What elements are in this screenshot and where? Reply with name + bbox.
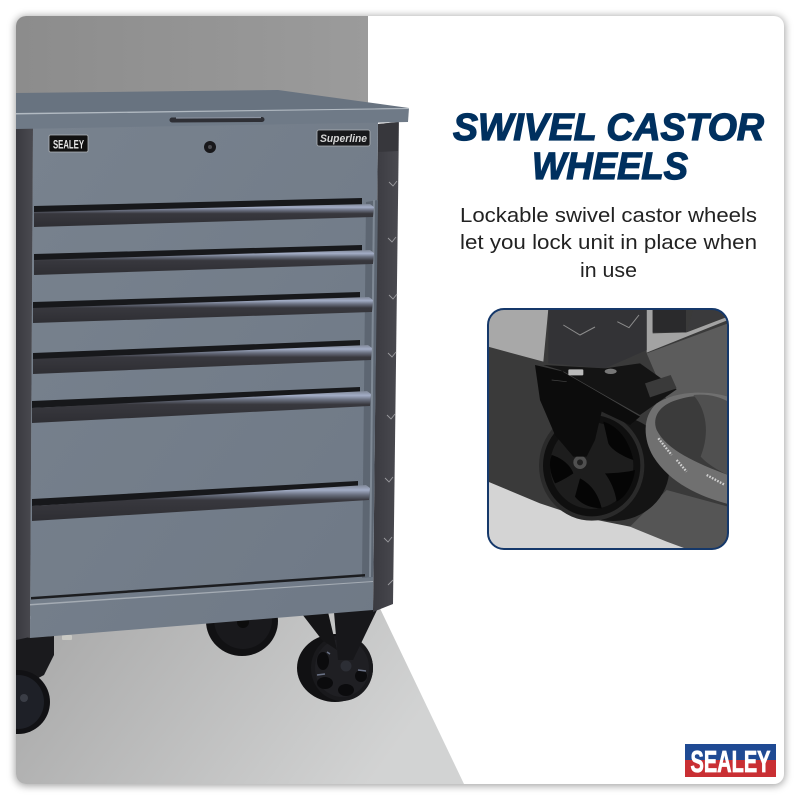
lock [204,141,216,153]
wheel tyre [601,420,669,521]
title: WHEELS [532,146,688,188]
cabinet light panel [488,309,548,362]
shoe upper [655,396,728,475]
lower right mat [630,490,728,549]
description text [460,204,757,282]
drawer 4 [33,340,372,374]
shoe toe mesh [693,395,728,475]
cabinet top surface [16,90,409,114]
left leveller bolt [62,635,72,640]
mat right side [647,323,728,403]
cabinet light strip right [647,309,728,353]
cabinet body front [30,122,378,638]
shoe sole print [658,438,725,485]
shoe sole [646,393,728,504]
light floor strip [488,482,687,549]
castor top plate [543,363,677,415]
title: SWIVEL CASTOR [453,107,765,149]
wheel hub [573,456,587,469]
drawer 2 [34,245,374,275]
top drawer handle [172,117,262,122]
SEALEY logo [685,744,776,779]
drawer 5 [32,387,371,423]
panel: product photo of tool cabinet [0,16,464,784]
wheel windows [603,422,633,460]
badge: SEALEY [49,135,88,152]
cabinet plinth [30,574,373,606]
rear castor wheel [206,618,278,656]
cabinet dark post [548,310,647,350]
badge: SEALEY: SEALEY [53,138,84,152]
description text: Lockable swivel castor wheels [460,204,757,227]
brake pedal [645,375,677,397]
left castor wheel [16,636,54,734]
dark floor mat [488,309,728,549]
floor [16,600,464,784]
description text: let you lock unit in place when [460,231,757,254]
drawer 3 [33,292,373,323]
description text: in use [580,259,637,282]
wall background [16,16,368,616]
castor bracket [535,365,640,457]
inset photo: foot locking castor wheel [488,309,728,549]
logo blue band [685,744,776,761]
front castor wheel [297,608,378,702]
wheel face [539,411,644,521]
lip highlight [16,108,409,114]
drawer 1 [34,198,374,227]
cabinet left post [16,128,33,640]
logo red band [685,760,776,777]
cabinet top lip [16,108,409,129]
title [453,107,765,188]
badge: Superline Pro: Superline [320,133,367,145]
right frame shadow strip [362,200,378,578]
cabinet right post [373,122,399,612]
drawer 6 [32,481,370,521]
wheel windows [317,652,329,670]
inset photo border [488,309,728,549]
